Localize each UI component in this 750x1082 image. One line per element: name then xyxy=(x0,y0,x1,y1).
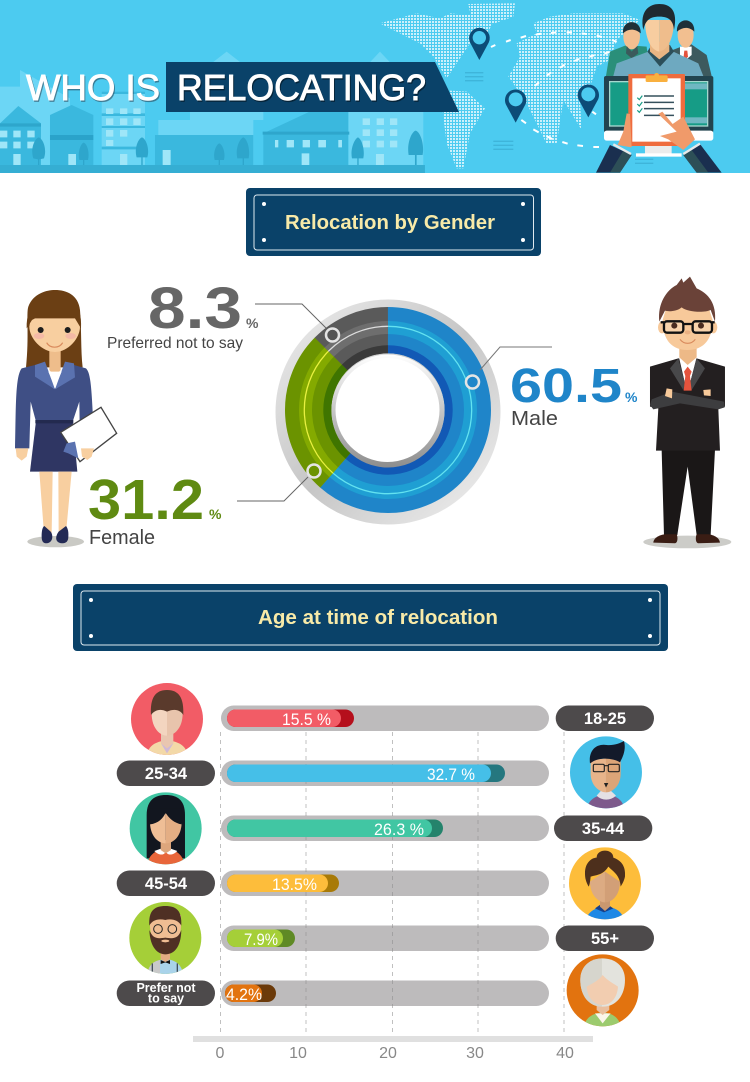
legend-like map dashes xyxy=(465,73,653,163)
value: female: Female xyxy=(89,527,155,549)
bar: 18-25 xyxy=(227,710,354,729)
bar: 55+: 7.9% xyxy=(244,930,278,949)
hands and sleeves xyxy=(596,112,722,173)
avatar: 18-25 xyxy=(131,683,203,757)
title: RELOCATING? xyxy=(178,68,427,110)
value: preferred not to say xyxy=(107,276,259,352)
axis: 40 xyxy=(556,1045,574,1062)
bar: prefer not to say: 4.2% xyxy=(226,985,262,1004)
value: preferred not to say: Preferred not to say xyxy=(107,335,243,352)
bar: 35-44 xyxy=(227,820,443,839)
bar: 25-34 xyxy=(227,764,505,784)
value: preferred not to say: 8.3 xyxy=(148,276,242,341)
value: preferred not to say: % xyxy=(246,315,259,331)
avatar: prefer not to say xyxy=(567,954,639,1028)
bar tracks xyxy=(221,706,549,1006)
city skyline xyxy=(0,52,425,173)
axis xyxy=(193,1036,593,1062)
avatar: 35-44 xyxy=(130,792,202,865)
value: male: 60.5 xyxy=(510,360,622,413)
section heading: relocation by gender: Relocation by Gender xyxy=(285,212,495,234)
bar: 25-34: 32.7 % xyxy=(427,765,475,784)
age labels xyxy=(117,706,654,1006)
segment: female xyxy=(270,292,506,528)
illustration: man xyxy=(643,277,731,548)
age labels: 45-54 xyxy=(145,875,188,893)
title: WHO IS xyxy=(26,67,160,108)
axis: 10 xyxy=(289,1045,307,1062)
section heading: age at time of relocation: Age at time of relocation xyxy=(258,606,498,629)
leader lines and markers xyxy=(237,304,552,501)
team of people illustration xyxy=(606,4,712,76)
illustration: woman xyxy=(15,290,117,547)
avatar: 55+ xyxy=(129,902,201,977)
clipboard xyxy=(628,73,685,146)
value: female xyxy=(88,468,222,549)
flight route dashes xyxy=(491,32,617,147)
age labels: Prefer not xyxy=(136,981,196,995)
value: male xyxy=(510,360,638,430)
title xyxy=(26,67,427,110)
dotted world map xyxy=(380,3,722,173)
bar: 35-44: 26.3 % xyxy=(374,820,424,839)
age labels: to say xyxy=(148,992,184,1006)
bar: 18-25: 15.5 % xyxy=(282,710,331,729)
value: male: % xyxy=(625,389,638,405)
title: WHO IS xyxy=(27,68,161,110)
bar: 45-54: 13.5% xyxy=(272,875,317,894)
age labels: 18-25 xyxy=(584,710,626,728)
bar: 55+ xyxy=(227,930,295,949)
segment: not stated xyxy=(270,292,506,528)
section heading: relocation by gender xyxy=(246,188,541,256)
monitor xyxy=(604,76,713,157)
donut chart: gender split xyxy=(270,292,506,528)
map pins xyxy=(469,28,599,123)
title ribbon xyxy=(166,62,459,112)
avatar: 25-34 xyxy=(570,736,642,810)
axis: 30 xyxy=(466,1045,484,1062)
value: female: % xyxy=(209,506,222,522)
age labels: 35-44 xyxy=(582,820,625,838)
age labels: 55+ xyxy=(591,930,619,948)
segment: male xyxy=(304,326,472,494)
title: RELOCATING? xyxy=(177,67,426,108)
header banner xyxy=(0,0,750,173)
value: male: Male xyxy=(511,408,558,430)
axis: 20 xyxy=(379,1045,397,1062)
section heading: age at time of relocation xyxy=(73,584,668,651)
value: female: 31.2 xyxy=(88,468,204,532)
axis: 0 xyxy=(216,1045,225,1062)
age labels: 25-34 xyxy=(145,765,188,783)
avatar: 45-54 xyxy=(569,847,641,922)
bar: 45-54 xyxy=(227,874,339,894)
bar chart: age at relocation xyxy=(193,706,593,1062)
